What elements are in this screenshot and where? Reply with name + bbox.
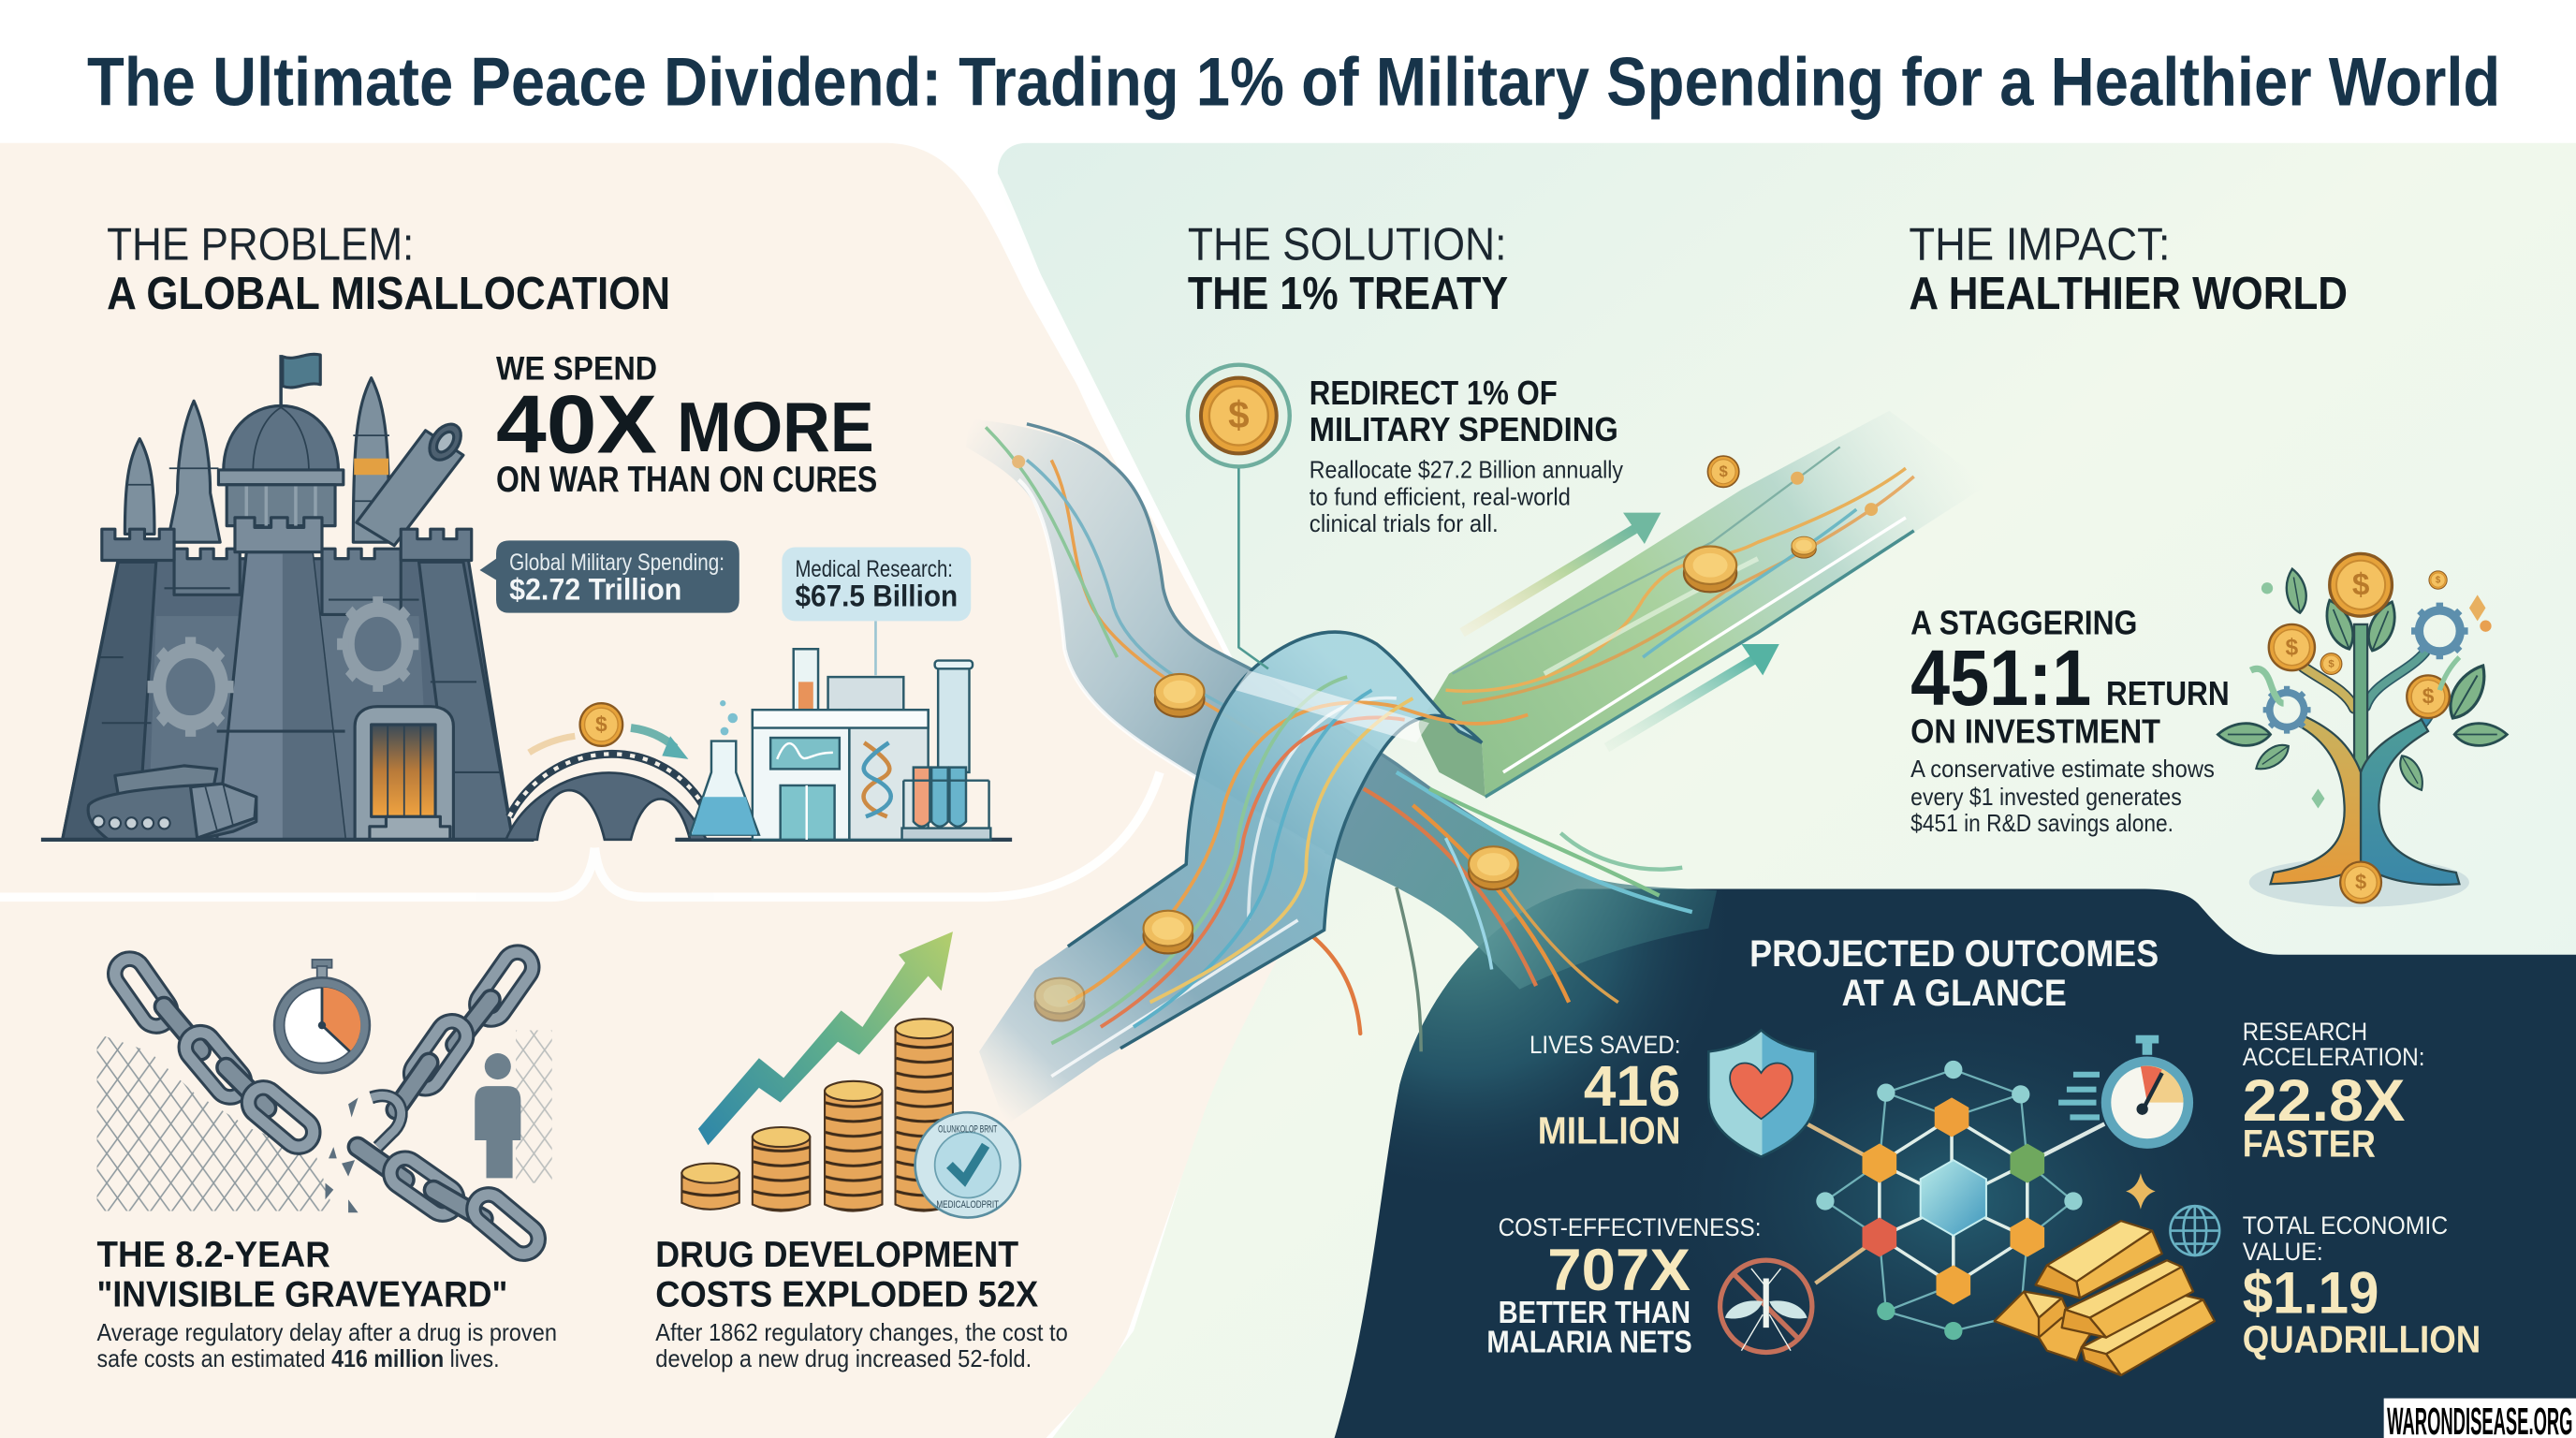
missiles xyxy=(124,378,389,542)
text: drug development costs: develop a new drug increased 52-fold. xyxy=(655,1346,1032,1372)
cannon xyxy=(357,418,467,546)
icon: globe xyxy=(2170,1206,2219,1255)
text: invisible graveyard xyxy=(97,1235,557,1372)
heading: projected outcomes xyxy=(1749,933,2159,1014)
floating shapes xyxy=(2250,582,2492,809)
arrow: green flow xyxy=(1462,513,1661,633)
stat: total economic value: QUADRILLION xyxy=(2243,1317,2481,1360)
heading: projected outcomes: AT A GLANCE xyxy=(1841,973,2067,1014)
panel: solution and impact background xyxy=(998,143,2576,1438)
icon: military fortress xyxy=(63,354,513,840)
stat: total economic value: $1.19 xyxy=(2243,1260,2378,1326)
heading: the solution: THE 1% TREATY xyxy=(1188,269,1508,319)
panel: problem background xyxy=(0,143,1327,1438)
text: 40X more: 40X xyxy=(496,379,657,471)
icon: broken chains, fence, stopwatch and person xyxy=(97,946,552,1260)
panel: projected outcomes background xyxy=(1334,889,2576,1438)
coins on ribbons xyxy=(1012,455,1878,1020)
text: redirect 1 percent xyxy=(1310,374,1623,537)
icon: rising arrow and coin stacks xyxy=(681,932,1020,1218)
towers xyxy=(63,518,513,840)
dome xyxy=(218,406,344,526)
panel dividers xyxy=(0,148,1160,897)
text: 451 to 1 return xyxy=(1910,603,2230,837)
approval seal: MEDICALODPRIT xyxy=(936,1199,999,1211)
heading: the problem: A GLOBAL MISALLOCATION xyxy=(107,269,670,319)
stat: cost effectiveness: MALARIA NETS xyxy=(1486,1325,1692,1359)
icon: laboratory xyxy=(690,649,990,840)
stat: lives saved: MILLION xyxy=(1538,1109,1680,1152)
heading: projected outcomes: PROJECTED OUTCOMES xyxy=(1749,933,2159,975)
heading: the solution xyxy=(1188,219,1508,319)
stat: lives saved: 416 xyxy=(1584,1054,1680,1119)
heading: the impact: THE IMPACT: xyxy=(1909,219,2170,270)
heading: the impact: A HEALTHIER WORLD xyxy=(1909,269,2348,319)
callout: medical research: $67.5 Billion xyxy=(795,580,958,613)
rising arrow xyxy=(698,932,953,1145)
text: drug development costs xyxy=(655,1235,1068,1372)
text: 451 to 1 return: A conservative estimate shows xyxy=(1910,756,2215,783)
network diagram xyxy=(1804,1061,2104,1340)
icon: bridge with coin xyxy=(506,703,707,840)
strands xyxy=(986,427,1692,1051)
text: invisible graveyard: "INVISIBLE GRAVEYARD" xyxy=(97,1274,507,1314)
icon: sparkle xyxy=(2126,1173,2156,1210)
stat: research acceleration: FASTER xyxy=(2243,1123,2376,1166)
rack xyxy=(902,768,990,840)
arrow: teal flow xyxy=(1606,644,1779,748)
left bars xyxy=(1995,1292,2095,1360)
text: invisible graveyard: THE 8.2-YEAR xyxy=(97,1235,330,1275)
building xyxy=(753,710,929,840)
icon: money tree xyxy=(2217,553,2507,907)
stopwatch xyxy=(274,960,370,1073)
text: redirect 1 percent: to fund efficient, real-world xyxy=(1310,485,1571,511)
gate xyxy=(355,707,453,840)
heading: the problem: THE PROBLEM: xyxy=(107,219,414,270)
approval seal: OLUNKOLOP BRNT xyxy=(938,1123,997,1135)
stat: research acceleration xyxy=(2243,1017,2425,1166)
fence xyxy=(97,1030,552,1211)
icon: gold bars xyxy=(1995,1221,2215,1375)
text: 451 to 1 return: 451:1 xyxy=(1910,634,2091,722)
icon: speedometer stopwatch xyxy=(2058,1035,2193,1149)
test tubes xyxy=(794,649,973,772)
trunk xyxy=(2271,624,2459,885)
chains xyxy=(110,946,545,1260)
arrow: small curved flow xyxy=(1560,833,1682,870)
text: redirect 1 percent: Reallocate $27.2 Billion annually xyxy=(1310,458,1623,484)
top bar xyxy=(2036,1221,2162,1299)
text: drug development costs: After 1862 regulatory changes, the cost to xyxy=(655,1320,1068,1346)
text: 451 to 1 return: every $1 invested generates xyxy=(1910,785,2182,811)
callout: military spending: $2.72 Trillion xyxy=(509,573,681,607)
stat: cost effectiveness xyxy=(1486,1212,1761,1359)
coins xyxy=(2269,553,2450,902)
flask xyxy=(690,700,759,835)
gears xyxy=(2263,603,2468,734)
flag xyxy=(281,354,320,411)
text: drug development costs: DRUG DEVELOPMENT xyxy=(655,1235,1019,1275)
text: 451 to 1 return: ON INVESTMENT xyxy=(1910,712,2160,750)
heading: the solution: THE SOLUTION: xyxy=(1188,219,1506,270)
tank xyxy=(88,766,256,840)
text: 40X more: ON WAR THAN ON CURES xyxy=(496,460,877,500)
icon: heart shield xyxy=(1708,1030,1815,1157)
lower right bar xyxy=(2082,1295,2215,1375)
branches xyxy=(2304,653,2428,768)
callout: military spending: Global Military Spending: xyxy=(509,550,724,576)
stat: cost effectiveness: 707X xyxy=(1547,1238,1690,1303)
text: 451 to 1 return: A STAGGERING xyxy=(1910,603,2137,641)
text: 451 to 1 return: $451 in R&D savings alone. xyxy=(1910,811,2174,837)
coin stacks xyxy=(681,1019,953,1211)
person silhouette xyxy=(475,1053,520,1178)
text: redirect 1 percent: clinical trials for all. xyxy=(1310,511,1499,537)
icon: coin callout xyxy=(1188,365,1290,668)
stat: lives saved xyxy=(1530,1030,1680,1152)
heading: the problem xyxy=(107,219,670,319)
stat: research acceleration: 22.8X xyxy=(2243,1068,2405,1134)
stat: cost effectiveness: COST-EFFECTIVENESS: xyxy=(1499,1212,1761,1241)
gears xyxy=(148,596,418,737)
flow: military ribbon passing under xyxy=(966,419,1717,1051)
stat: lives saved: LIVES SAVED: xyxy=(1530,1030,1680,1059)
stat: total economic value: VALUE: xyxy=(2243,1237,2323,1266)
stat: total economic value xyxy=(2243,1211,2481,1360)
text: invisible graveyard: Average regulatory delay after a drug is proven xyxy=(97,1320,557,1346)
ground lines xyxy=(41,839,1012,841)
stat: research acceleration: RESEARCH xyxy=(2243,1017,2367,1046)
stat: cost effectiveness: BETTER THAN xyxy=(1499,1296,1690,1330)
stat: total economic value: TOTAL ECONOMIC xyxy=(2243,1211,2448,1240)
middle right bar xyxy=(2062,1260,2193,1338)
heading: the impact xyxy=(1909,219,2348,319)
text: redirect 1 percent: REDIRECT 1% OF xyxy=(1310,374,1558,412)
callout: military spending xyxy=(479,540,739,613)
approval seal xyxy=(915,1112,1020,1218)
flow: green ribbon to healthier world xyxy=(1419,411,1988,797)
callout: medical research: Medical Research: xyxy=(795,557,953,582)
text: invisible graveyard: safe costs an estimated 416 million lives. xyxy=(97,1346,500,1372)
text: drug development costs: COSTS EXPLODED 52X xyxy=(655,1274,1038,1314)
icon: crossed-out mosquito xyxy=(1720,1260,1812,1352)
callout: medical research xyxy=(782,547,971,675)
text: 40X more xyxy=(496,350,877,500)
castle walls xyxy=(63,559,513,840)
text: 451 to 1 return: RETURN xyxy=(2106,674,2230,712)
leaves xyxy=(2217,567,2507,794)
text: 40X more: MORE xyxy=(677,388,874,466)
stat: research acceleration: ACCELERATION: xyxy=(2243,1042,2425,1071)
flow: lower strip and arching 1% hump xyxy=(979,632,1528,1125)
text: 40X more: WE SPEND xyxy=(496,350,657,387)
text: redirect 1 percent: MILITARY SPENDING xyxy=(1310,410,1618,448)
